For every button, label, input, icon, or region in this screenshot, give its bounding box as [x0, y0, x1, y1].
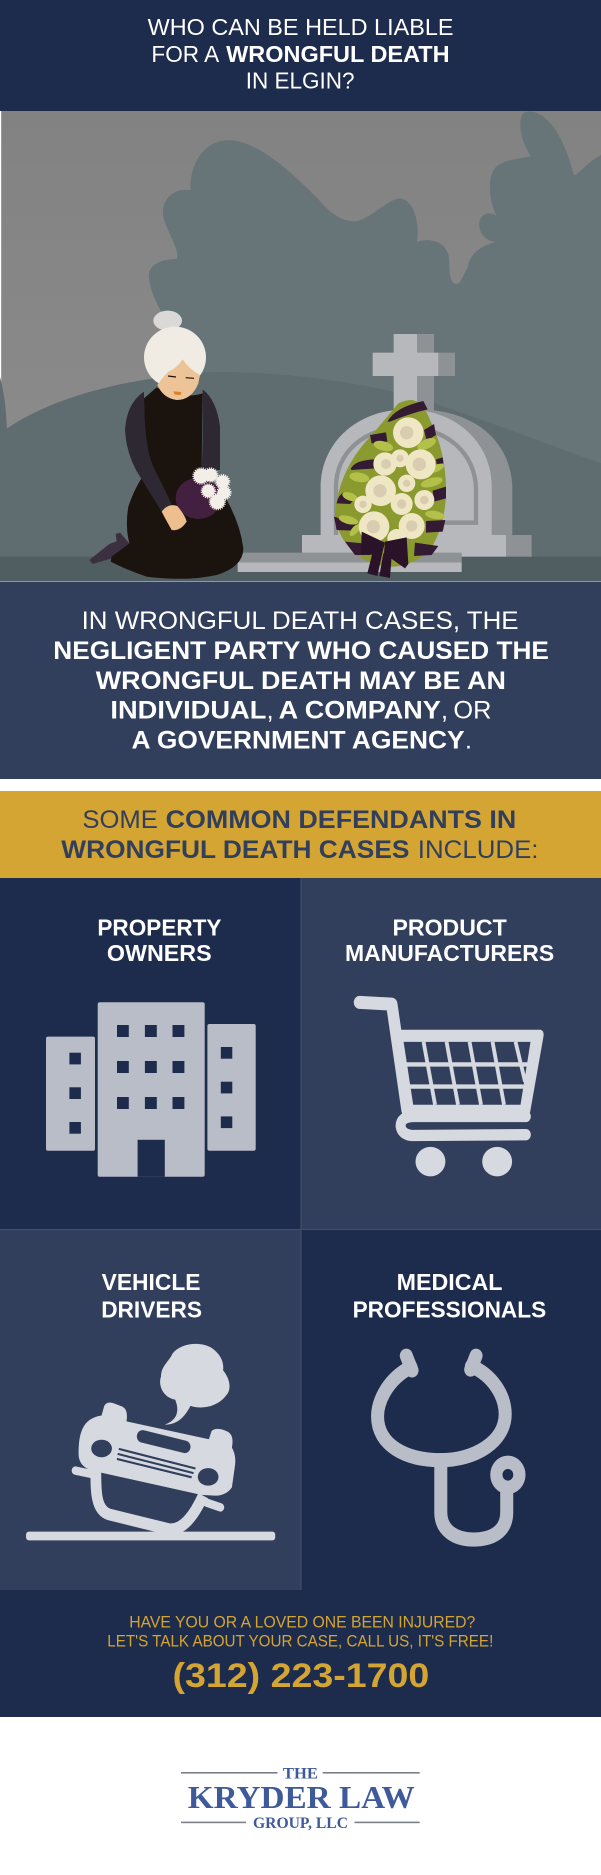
icon: shopping cart [360, 1002, 544, 1176]
call to action text: HAVE YOU OR A LOVED ONE BEEN INJURED? [129, 1613, 475, 1631]
label: MEDICAL [397, 1269, 503, 1295]
cross [373, 334, 455, 414]
sleeves [125, 392, 172, 512]
section heading [61, 806, 539, 864]
intro text: NEGLIGENT PARTY WHO CAUSED THE [53, 637, 549, 665]
ground [0, 556, 601, 582]
header panel [0, 0, 601, 111]
intro text: . [465, 727, 472, 755]
logo: The Kryder Law Group, LLC: THE [283, 1766, 318, 1782]
background trees [149, 112, 601, 478]
label: PRODUCT [392, 915, 507, 941]
wreath [334, 400, 446, 578]
section heading: INCLUDE: [418, 836, 538, 864]
label: VEHICLE [102, 1269, 200, 1295]
section heading: COMMON DEFENDANTS IN [166, 806, 516, 834]
label: MANUFACTURERS [345, 940, 554, 966]
head [144, 311, 206, 400]
hand [162, 505, 187, 530]
bouquet [176, 469, 230, 519]
title: WRONGFUL DEATH [226, 41, 450, 67]
intro text: WRONGFUL DEATH MAY BE AN [96, 667, 506, 695]
panel: medical professionals [300, 1229, 601, 1590]
logo: The Kryder Law Group, LLC: GROUP, LLC [253, 1815, 348, 1832]
intro text: , [267, 697, 274, 725]
label [101, 1269, 202, 1322]
intro text [53, 607, 549, 755]
panel: intro statement [0, 582, 601, 779]
panel: vehicle drivers [0, 1229, 300, 1590]
intro text: INDIVIDUAL [110, 697, 266, 725]
headstone [238, 409, 532, 572]
shoe [89, 533, 131, 564]
label [97, 915, 222, 966]
hill [0, 372, 601, 559]
label: DRIVERS [101, 1296, 202, 1322]
title: FOR A [151, 41, 220, 67]
label: PROPERTY [97, 915, 222, 941]
label: PROFESSIONALS [353, 1296, 546, 1322]
icon: overturned car [26, 1344, 275, 1540]
intro text: IN WRONGFUL DEATH CASES, THE [82, 607, 519, 635]
icon: buildings [46, 1002, 256, 1177]
call to action text [107, 1613, 493, 1650]
label [353, 1269, 546, 1322]
panel: product manufacturers [300, 878, 601, 1229]
section heading: SOME [82, 806, 158, 834]
title [148, 14, 454, 93]
logo: The Kryder Law Group, LLC [181, 1766, 420, 1832]
bow [361, 532, 408, 578]
call to action text: LET'S TALK ABOUT YOUR CASE, CALL US, IT'S FREE! [107, 1632, 493, 1650]
title: WHO CAN BE HELD LIABLE [148, 14, 454, 40]
label [345, 915, 554, 966]
panel: call to action [0, 1590, 601, 1717]
panel: gold heading band [0, 791, 601, 878]
logo: The Kryder Law Group, LLC: KRYDER LAW [188, 1780, 415, 1815]
title: IN ELGIN? [246, 67, 354, 93]
tombstone with wreath [238, 334, 532, 578]
intro text: , [441, 697, 448, 725]
panel: property owners [0, 878, 300, 1229]
intro text: OR [453, 697, 491, 725]
icon: stethoscope [378, 1356, 519, 1540]
intro text: A GOVERNMENT AGENCY [132, 727, 465, 755]
label: OWNERS [107, 940, 212, 966]
woman [89, 311, 243, 579]
intro text: A COMPANY [279, 697, 441, 725]
black dress [111, 387, 243, 579]
illustration: mourning woman at grave [0, 111, 601, 582]
phone number: (312) 223-1700 [172, 1657, 429, 1695]
section heading: WRONGFUL DEATH CASES [61, 836, 409, 864]
